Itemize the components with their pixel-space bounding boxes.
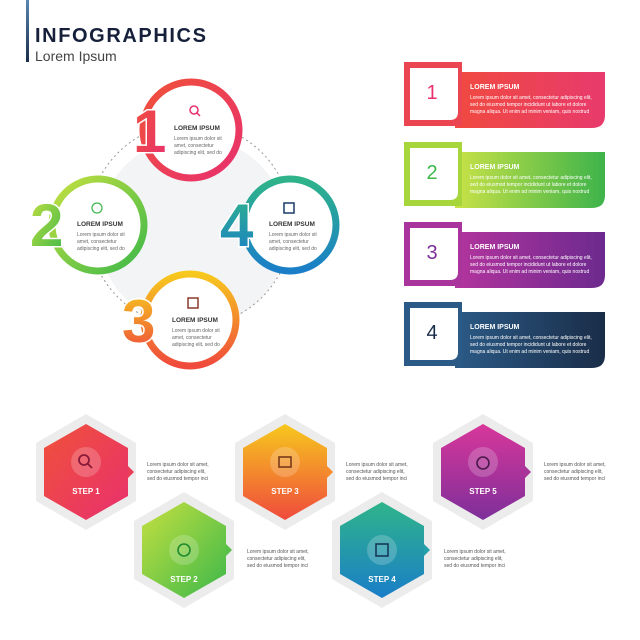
card 1: LOREM IPSUM: [470, 84, 520, 91]
circle item 2: 2: [30, 192, 63, 259]
circle item 1: Lorem ipsum dolor sit: [174, 136, 222, 142]
circle item 4: Lorem ipsum dolor sit: [269, 232, 317, 238]
step 4 hexagon: STEP 4: [368, 575, 396, 584]
step 3 hexagon: STEP 3: [271, 487, 299, 496]
circle item 2: adipiscing elit, sed do: [77, 246, 125, 252]
card 2: Lorem ipsum dolor sit amet, consectetur adipiscing elit,: [470, 175, 592, 181]
step 5 hexagon: STEP 5: [469, 487, 497, 496]
card 4: magna aliqua. Ut enim ad minim veniam, quis nostrud: [470, 349, 589, 355]
circle item 1: LOREM IPSUM: [174, 125, 220, 132]
circle item 2: [30, 179, 144, 271]
circle item 3: Lorem ipsum dolor sit: [172, 328, 220, 334]
card 1: [404, 62, 605, 128]
step 4 text: Lorem ipsum dolor sit amet,: [444, 549, 506, 555]
step 3 text: [346, 462, 408, 482]
circle item 1: amet, consectetur: [174, 143, 214, 149]
circle item 1: adipiscing elit, sed do: [174, 150, 222, 156]
step 1 text: [147, 462, 209, 482]
step 3 text: sed do eiusmod tempor inci: [346, 476, 407, 482]
step 3 text: consectetur adipiscing elit,: [346, 469, 405, 475]
circle item 4: LOREM IPSUM: [269, 221, 315, 228]
circle item 2: LOREM IPSUM: [77, 221, 123, 228]
step 2 hexagon: [134, 492, 234, 608]
step 5 hexagon: [433, 414, 533, 530]
card 4: Lorem ipsum dolor sit amet, consectetur adipiscing elit,: [470, 335, 592, 341]
step 3 hexagon: [235, 414, 335, 530]
step 1 text: Lorem ipsum dolor sit amet,: [147, 462, 209, 468]
card 1: sed do eiusmod tempor incididunt ut labore et dolore: [470, 102, 587, 108]
card 2: sed do eiusmod tempor incididunt ut labore et dolore: [470, 182, 587, 188]
step 4 hexagon: [332, 492, 432, 608]
step 5 text: consectetur adipiscing elit,: [544, 469, 603, 475]
card 2: [404, 142, 605, 208]
circle item 3: 3: [122, 288, 155, 355]
card 4: LOREM IPSUM: [470, 324, 520, 331]
circle diagram: [30, 82, 336, 366]
step 2 hexagon: STEP 2: [170, 575, 198, 584]
card 4: sed do eiusmod tempor incididunt ut labore et dolore: [470, 342, 587, 348]
card 3: [404, 222, 605, 288]
step 5 text: Lorem ipsum dolor sit amet,: [544, 462, 606, 468]
circle item 4: adipiscing elit, sed do: [269, 246, 317, 252]
circle item 2: Lorem ipsum dolor sit: [77, 232, 125, 238]
card 3: LOREM IPSUM: [470, 244, 520, 251]
title block: INFOGRAPHICS: [35, 25, 208, 47]
circle item 4: [220, 179, 336, 271]
step 4 text: consectetur adipiscing elit,: [444, 556, 503, 562]
step 1 hexagon: STEP 1: [72, 487, 100, 496]
card 4: [404, 302, 605, 368]
card 3: magna aliqua. Ut enim ad minim veniam, quis nostrud: [470, 269, 589, 275]
circle item 3: LOREM IPSUM: [172, 317, 218, 324]
step 1 text: sed do eiusmod tempor inci: [147, 476, 208, 482]
circle item 4: 4: [220, 192, 254, 259]
card 1: 1: [426, 82, 438, 104]
step 4 text: sed do eiusmod tempor inci: [444, 563, 505, 569]
step 2 text: sed do eiusmod tempor inci: [247, 563, 308, 569]
step 4 text: [444, 549, 506, 569]
card 1: Lorem ipsum dolor sit amet, consectetur adipiscing elit,: [470, 95, 592, 101]
card 3: Lorem ipsum dolor sit amet, consectetur adipiscing elit,: [470, 255, 592, 261]
step 5 text: sed do eiusmod tempor inci: [544, 476, 605, 482]
card 4: 4: [426, 322, 438, 344]
title block: Lorem Ipsum: [35, 48, 117, 64]
card 1: magna aliqua. Ut enim ad minim veniam, quis nostrud: [470, 109, 589, 115]
step 2 text: [247, 549, 309, 569]
circle item 4: amet, consectetur: [269, 239, 309, 245]
circle item 3: amet, consectetur: [172, 335, 212, 341]
step 1 text: consectetur adipiscing elit,: [147, 469, 206, 475]
card 2: 2: [426, 162, 438, 184]
circle item 1: 1: [133, 98, 166, 165]
step 5 text: [544, 462, 606, 482]
step 1 hexagon: [36, 414, 136, 530]
step 3 text: Lorem ipsum dolor sit amet,: [346, 462, 408, 468]
circle item 2: amet, consectetur: [77, 239, 117, 245]
card 3: sed do eiusmod tempor incididunt ut labore et dolore: [470, 262, 587, 268]
step 2 text: consectetur adipiscing elit,: [247, 556, 306, 562]
card 2: LOREM IPSUM: [470, 164, 520, 171]
card 3: 3: [426, 242, 438, 264]
title block: [26, 0, 208, 64]
circle item 3: adipiscing elit, sed do: [172, 342, 220, 348]
circle item 1: [133, 82, 239, 178]
card 2: magna aliqua. Ut enim ad minim veniam, quis nostrud: [470, 189, 589, 195]
step 2 text: Lorem ipsum dolor sit amet,: [247, 549, 309, 555]
circle item 3: [122, 274, 236, 366]
